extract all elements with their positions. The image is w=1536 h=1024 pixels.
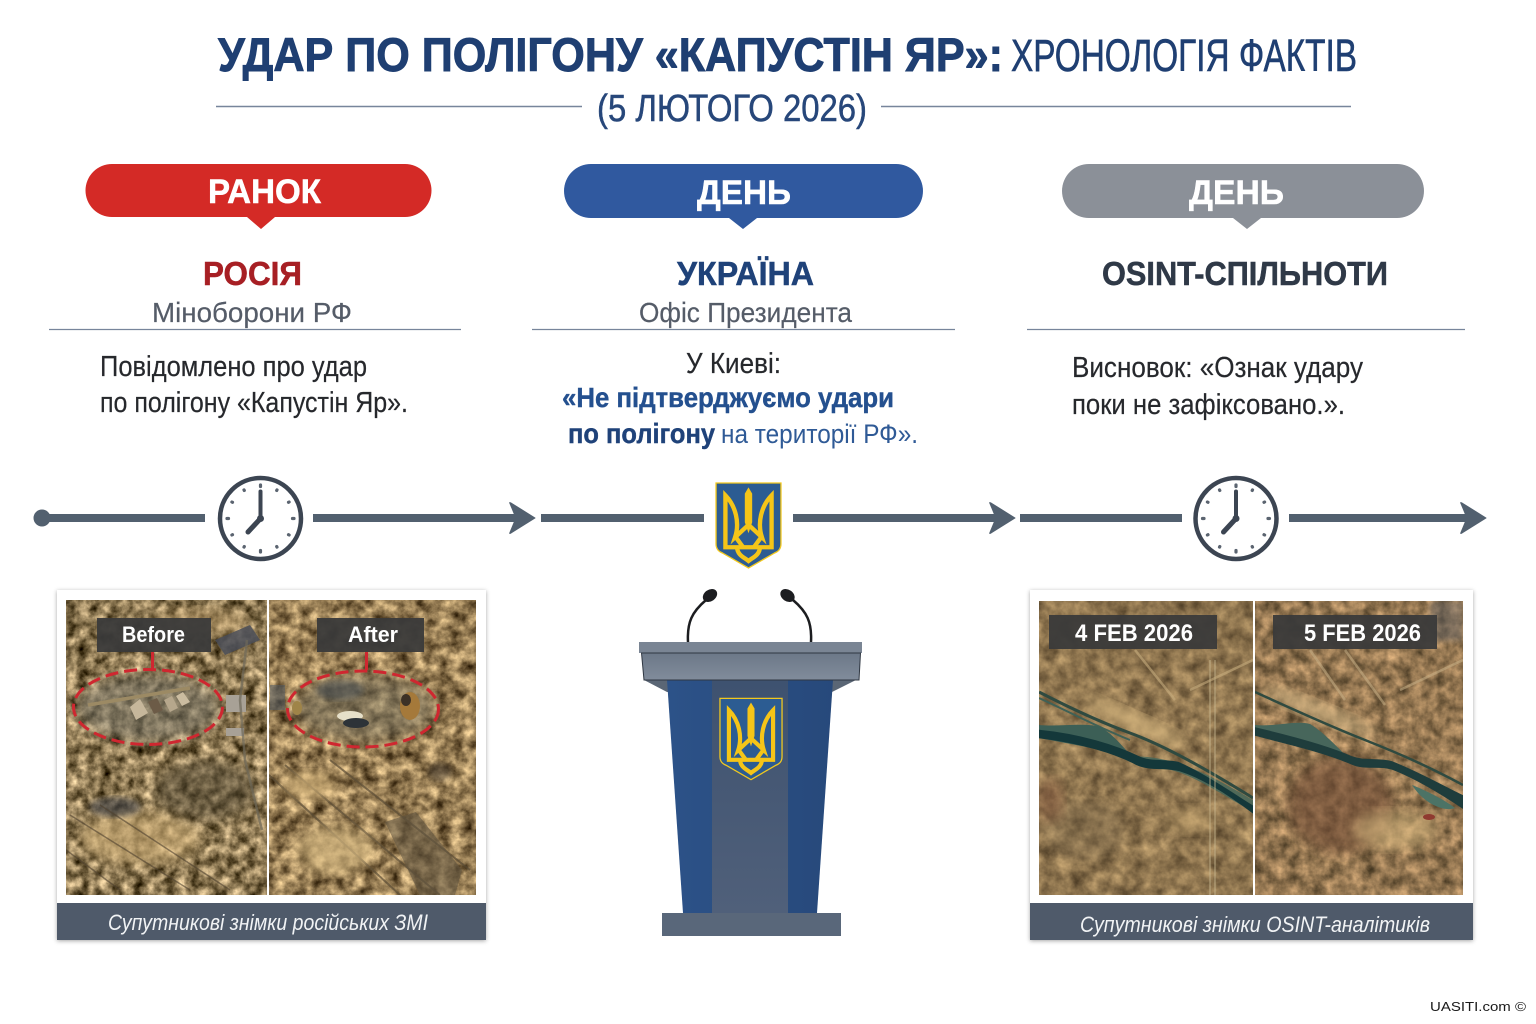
statement: OSINT: Висновок: «Ознак удару: [1072, 352, 1363, 384]
title: ХРОНОЛОГІЯ ФАКТІВ: [1011, 30, 1357, 81]
statement: Russia: по полігону «Капустін Яр».: [100, 387, 408, 419]
statement: OSINT: [1072, 352, 1363, 421]
source heading: Russia: РОСІЯ: [203, 255, 302, 292]
caption: Russian media: [57, 903, 486, 940]
time badge: day grey: ДЕНЬ: [1189, 174, 1284, 212]
icon: clock left: [220, 478, 301, 559]
label: 4 FEB 2026: 4 FEB 2026: [1075, 620, 1193, 647]
footer credit: UASITI.com ©: [1430, 999, 1526, 1014]
label: After: After: [348, 622, 398, 647]
statement: Ukraine: по полігону: [568, 418, 715, 449]
podium base: [662, 913, 841, 936]
podium body: [667, 680, 833, 913]
time badge: day blue: ДЕНЬ: [697, 174, 791, 212]
time badge: morning: [86, 164, 432, 229]
photo frame: [1030, 590, 1473, 940]
icon: Ukrainian coat of arms on timeline: [716, 483, 781, 568]
subtitle with date: (5 ЛЮТОГО 2026): [597, 88, 867, 130]
panel: satellite comparison, OSINT analysts: [1030, 590, 1473, 940]
icon: coat of arms on podium: [720, 698, 782, 780]
caption: OSINT analysts: Супутникові знімки OSINT-аналітиків: [1080, 912, 1430, 937]
column: Russia: [49, 164, 461, 419]
label: 5 FEB 2026: 5 FEB 2026: [1304, 620, 1421, 647]
statement: Ukraine: [562, 348, 918, 449]
icon: clock right: [1196, 478, 1276, 559]
label: Before: [97, 618, 211, 652]
statement: Ukraine: У Киеві:: [686, 348, 781, 380]
source heading: Russia: Міноборони РФ: [152, 297, 352, 328]
arrow segment 2: [541, 503, 1015, 533]
timeline with arrows: [34, 503, 1486, 533]
marker: before strike area: [74, 652, 222, 744]
label: Before: Before: [122, 622, 185, 647]
satellite image: 5 February: [1255, 601, 1463, 895]
statement: OSINT: поки не зафіксовано.».: [1072, 389, 1345, 421]
podium centre column: [712, 680, 788, 913]
column: Ukraine: [532, 164, 955, 449]
podium underside: [644, 680, 856, 692]
divider between images: [1253, 601, 1255, 895]
title: УДАР ПО ПОЛІГОНУ «КАПУСТІН ЯР»:: [218, 28, 1003, 81]
time badge: day blue: [564, 164, 923, 229]
source heading: Russia: [49, 255, 461, 330]
statement: Russia: Повідомлено про удар: [100, 351, 367, 383]
marker: after strike area: [288, 652, 438, 747]
source heading: OSINT communities: OSINT-СПІЛЬНОТИ: [1102, 255, 1388, 292]
caption: OSINT analysts: [1030, 903, 1473, 940]
source heading: Ukraine: УКРАЇНА: [677, 255, 814, 292]
satellite image: after: [269, 600, 476, 895]
label: 4 FEB 2026: [1049, 615, 1217, 649]
panel: satellite before and after, Russian media: [57, 590, 486, 940]
label: 5 FEB 2026: [1273, 615, 1437, 649]
source heading: Ukraine: [532, 255, 955, 330]
microphones: [688, 588, 811, 642]
divider between images: [267, 600, 269, 895]
satellite image: 4 February: [1036, 601, 1253, 895]
statement: Russia: [100, 351, 408, 419]
label: After: [317, 618, 424, 652]
statement: Ukraine: на території РФ».: [721, 419, 918, 449]
column: OSINT: [1027, 164, 1465, 421]
arrow segment 1: [34, 503, 535, 533]
caption: Russian media: Супутникові знімки російських ЗМІ: [108, 910, 428, 935]
photo frame: [57, 590, 486, 940]
time badge: day grey: [1062, 164, 1424, 229]
source heading: Ukraine: Офіс Президента: [639, 297, 852, 328]
illustration: podium with microphones: [639, 588, 862, 936]
satellite image: before: [66, 600, 267, 895]
arrow segment 3: [1020, 503, 1486, 533]
statement: Ukraine: «Не підтверджуємо удари: [562, 382, 894, 413]
time badge: morning: РАНОК: [208, 173, 321, 211]
podium top: [639, 642, 862, 680]
